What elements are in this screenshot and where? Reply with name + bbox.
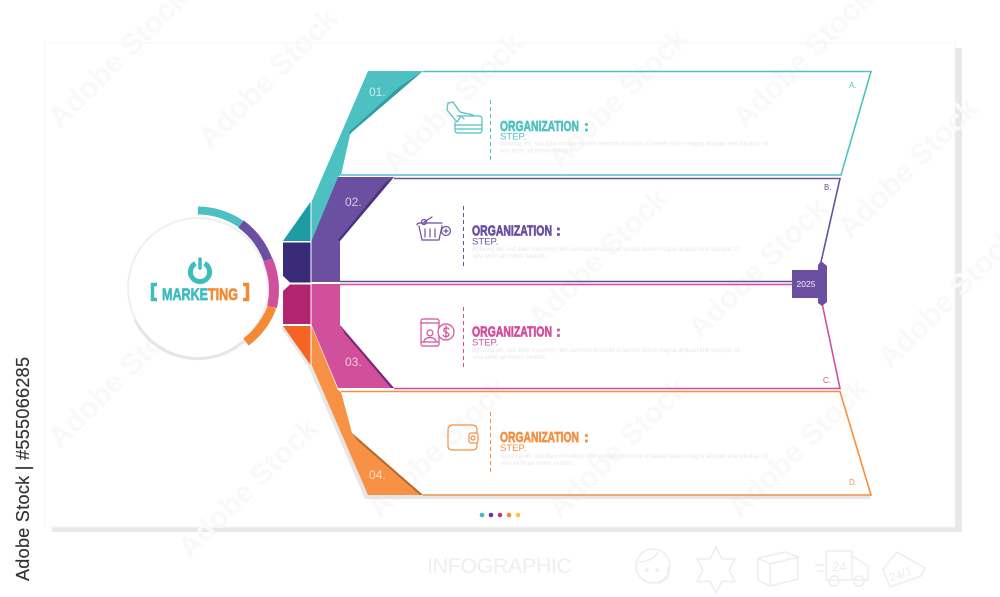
step 02 divider	[462, 206, 464, 266]
step 04 text block: :	[584, 430, 589, 446]
stock watermark: Adobe Stock	[377, 27, 530, 180]
center circle	[128, 210, 274, 359]
panel: white card	[45, 43, 955, 527]
step 02 ribbon fold	[338, 177, 394, 241]
step 01 number: 01.	[369, 85, 386, 99]
step 04 base triangle	[283, 326, 310, 365]
step 01 divider	[490, 100, 492, 160]
step 01 letter: A.	[849, 81, 857, 90]
step 01 text block: :	[584, 119, 589, 135]
step 03 number: 03.	[345, 355, 362, 369]
icon: phone with coin	[421, 319, 454, 346]
step 01 text block: dipiscing elit, sed diam nonummy nibh euismod tincidunt ut laoreet dolore magna aliquam erat volutpat. Ut	[500, 142, 768, 148]
icon: box	[758, 552, 798, 586]
step 01 text block: STEP.	[500, 132, 526, 142]
step 03 text block: :	[556, 324, 561, 340]
icon: support agent	[636, 549, 670, 584]
icon: wallet	[448, 425, 478, 450]
stock watermark: Adobe Stock	[832, 92, 985, 245]
step 01 text block	[499, 119, 768, 154]
step 04 letter: D.	[849, 478, 857, 487]
step 02 text block: ORGANIZATION	[472, 224, 552, 240]
marketing label: MARKETING	[162, 286, 238, 304]
ring segment pink	[268, 260, 274, 307]
stock watermark: Adobe Stock	[192, 2, 345, 155]
step 04 text block: STEP.	[500, 443, 526, 454]
step 03 text block: wisi enim ad minim veniam.	[472, 355, 547, 361]
panel: step 03	[283, 284, 840, 388]
stock watermark: Adobe Stock	[42, 302, 195, 455]
step 02 base block	[283, 242, 310, 282]
step 02 text block: :	[556, 224, 561, 240]
panel: step 04	[283, 326, 871, 495]
panel: step 01	[283, 71, 871, 242]
step 03 text block: STEP.	[472, 338, 498, 348]
step 04 ribbon	[312, 326, 423, 495]
step 04 text block: dipiscing elit, sed diam nonummy nibh euismod tincidunt ut laoreet dolore magna aliquam erat volutpat. Ut	[500, 454, 768, 460]
step 04 frame	[341, 392, 871, 495]
icon: power symbol	[190, 259, 210, 282]
step 02 text block	[472, 224, 740, 260]
icon: 24/1 sign	[883, 552, 925, 587]
step 04 text block	[500, 430, 768, 467]
step 02 ribbon	[312, 177, 394, 282]
stock watermark: Adobe Stock	[682, 192, 835, 345]
icon: hand with credit card	[447, 102, 482, 133]
icon: delivery truck	[815, 551, 868, 586]
step 04 shape shadow	[282, 326, 870, 499]
stock id caption: Adobe Stock | #555066285	[13, 357, 33, 581]
icon: delivery truck: 24	[832, 559, 846, 574]
step 04 text block: ORGANIZATION	[500, 430, 579, 446]
icon: 24/1 sign: 24/1	[887, 564, 914, 585]
icon: sheriff star	[697, 547, 735, 593]
step 03 ribbon fold	[340, 325, 394, 388]
year tab: 2025	[797, 279, 816, 289]
step 02 text block: dipiscing elit, sed diam nonummy nibh euismod tincidunt ut laoreet dolore magna aliquam erat volutpat. Ut	[472, 247, 740, 253]
ring segment teal	[198, 210, 241, 224]
step 01 text block: wisi enim ad minim veniam.	[499, 148, 574, 154]
panel: step 02	[283, 177, 840, 282]
pagination dots	[480, 513, 520, 517]
step 02 text block: wisi enim ad minim veniam.	[472, 254, 547, 260]
ring segment orange	[246, 307, 272, 342]
step 01 ribbon	[312, 71, 423, 242]
stock watermark: Adobe Stock	[542, 22, 695, 175]
step 03 letter: C.	[823, 376, 831, 385]
step 04 divider	[490, 412, 492, 472]
step 01 frame	[341, 72, 871, 175]
stock watermark: Adobe Stock	[722, 372, 875, 525]
step 02 frame	[340, 178, 840, 282]
panel: card shadow	[52, 48, 962, 532]
step 03 frame	[340, 284, 840, 388]
step 02 text block: STEP.	[472, 236, 498, 248]
year tab	[792, 261, 827, 306]
stock watermark: Adobe Stock	[522, 182, 675, 335]
step 03 divider	[462, 307, 464, 367]
step 01 ribbon fold	[349, 71, 423, 134]
step 03 text block: dipiscing elit, sed diam nonummy nibh euismod tincidunt ut laoreet dolore magna aliquam erat volutpat. Ut	[472, 348, 740, 354]
stock watermark: Adobe Stock	[172, 412, 325, 565]
stock watermark: Adobe Stock	[542, 372, 695, 525]
step 01 base triangle	[283, 202, 310, 241]
step 03 ribbon	[312, 284, 394, 388]
step 04 text block: wisi enim ad minim veniam.	[500, 461, 575, 467]
stock watermark: Adobe Stock	[362, 372, 515, 525]
step 01 text block: ORGANIZATION	[500, 119, 579, 135]
circle lower shadow	[135, 316, 262, 359]
step 02 number: 02.	[345, 195, 362, 209]
ring segment purple	[241, 224, 268, 260]
footer label: INFOGRAPHIC	[427, 554, 572, 578]
step 04 number: 04.	[369, 468, 386, 482]
step 03 text block: ORGANIZATION	[472, 324, 552, 340]
step 02 letter: B.	[824, 183, 832, 192]
icon: shopping basket	[417, 217, 450, 240]
step 03 text block	[472, 324, 740, 361]
step 04 ribbon fold	[352, 433, 423, 495]
step 03 base block	[283, 284, 310, 324]
